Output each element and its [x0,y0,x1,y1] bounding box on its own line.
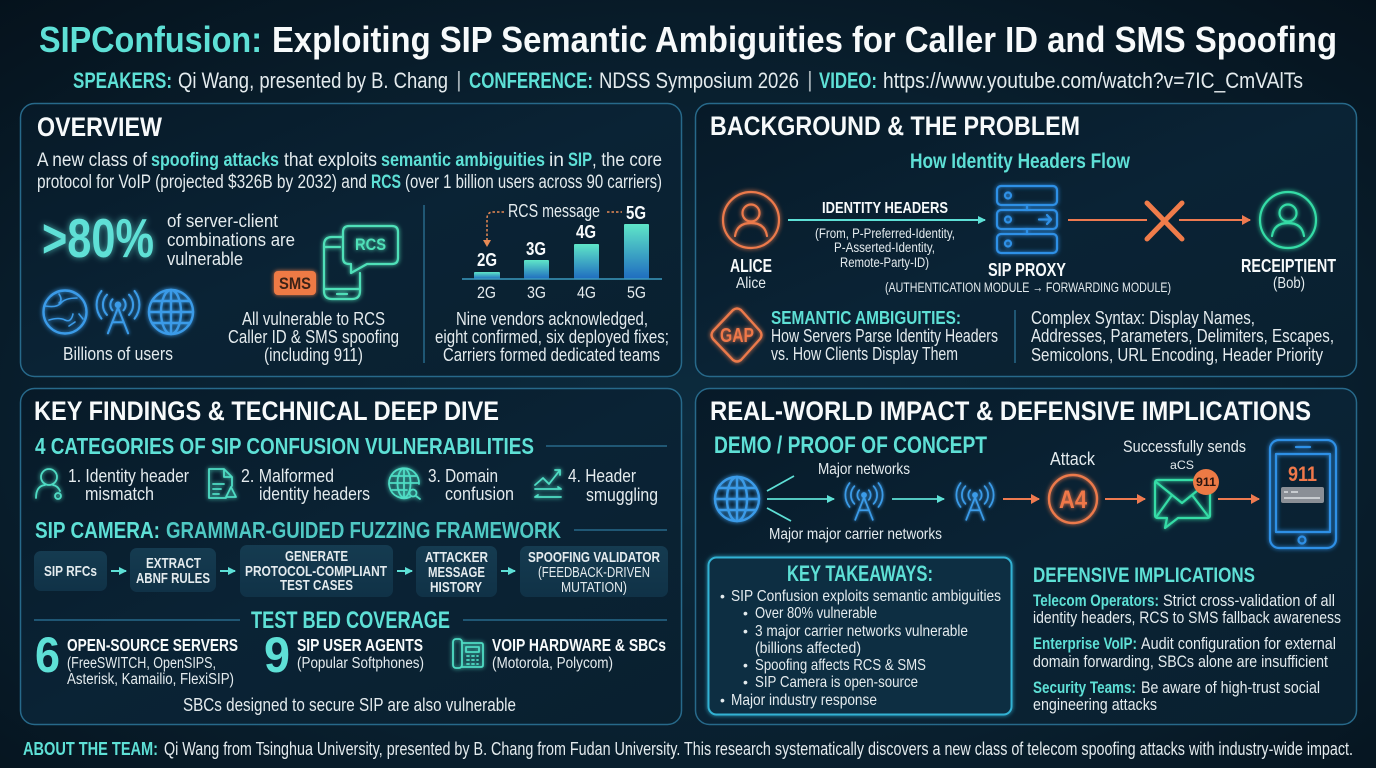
flow step: spoofing validator: MUTATION) [561,579,627,596]
label: successfully sends: Successfully sends [1123,437,1246,456]
icon: phone showing 911: 911 [1288,463,1317,486]
caption: all vulnerable: Caller ID & SMS spoofing [228,326,399,347]
heading: key findings: KEY FINDINGS & TECHNICAL DEEP DIVE [34,396,499,426]
section: defensive implications: Be aware of high-trust social [1141,679,1320,697]
section: defensive implications: Enterprise VoIP: [1033,635,1137,653]
subtitle: speakers, conference, video: CONFERENCE: [469,68,593,93]
flow step: attacker message history: HISTORY [430,579,482,596]
category 2: malformed identity headers: 2. Malformed [241,465,334,486]
label: major networks: Major networks [818,461,910,478]
bar chart: RCS message by generation: 4G [577,283,596,302]
stat: 6 open-source servers [35,627,238,688]
overview intro text: A new class of [37,150,148,171]
text: semantic ambiguities [771,307,998,364]
stat: 9 SIP user agents: 9 [264,627,290,683]
label: recipient: RECEIPTIENT [1241,256,1336,276]
heading: real-world impact: REAL-WORLD IMPACT & DEFENSIVE IMPLICATIONS [710,396,1311,426]
icon: A4 attack: A4 [1059,486,1087,514]
stat: 9 SIP user agents: (Popular Softphones) [297,655,424,672]
callout: key takeaways: Major industry response [731,692,877,709]
subtitle: speakers, conference, video: VIDEO: [819,68,877,93]
callout: key takeaways: 3 major carrier networks vulnerable [755,623,968,640]
bar chart: RCS message by generation: 2G [477,250,497,270]
stat: 9 SIP user agents [264,627,424,683]
overview intro text: semantic ambiguities [381,150,545,171]
label: SIP proxy: SIP PROXY [988,260,1066,280]
label: successfully sends [1123,437,1246,472]
panel: key findings [20,388,682,724]
overview intro text: that exploits [284,150,377,171]
flow step: generate test cases: PROTOCOL-COMPLIANT [245,563,387,580]
label: Alice [730,256,772,292]
bar chart: RCS message by generation: RCS message [508,201,600,221]
arrow [1003,498,1039,500]
subtitle: speakers, conference, video: SPEAKERS: [73,68,172,93]
flow step: extract ABNF rules: EXTRACT [146,555,201,572]
panel: overview [20,104,682,376]
overview intro text: in [549,150,564,171]
stat description: vulnerable [167,248,243,269]
caption: vendors: Carriers formed dedicated teams [443,344,660,365]
icon: Alice [723,192,779,248]
flow step: SIP RFCs: SIP RFCs [44,563,97,580]
label: Alice: ALICE [730,256,772,276]
stat description: combinations are [167,229,295,250]
bar chart: RCS message by generation [462,201,662,302]
overview intro text: RCS [371,172,401,193]
label: identity headers: P-Asserted-Identity, [834,240,935,255]
flow step: generate test cases: TEST CASES [280,577,353,594]
category 3: domain confusion: 3. Domain [428,465,498,486]
icon: SMS badge: SMS [279,274,311,293]
label: successfully sends: aCS [1170,458,1194,472]
callout: key takeaways: • [743,674,748,690]
flow step: spoofing validator [520,546,668,597]
label: recipient [1241,256,1336,292]
flow step: spoofing validator: SPOOFING VALIDATOR [528,549,660,566]
category 2: malformed identity headers [209,465,370,504]
section: defensive implications: Strict cross-validation of all [1163,592,1335,610]
label: carrier networks: Major major carrier networks [769,526,942,543]
section: defensive implications: Telecom Operators: [1033,592,1159,610]
VoIP hardware and SBCs: (Motorola, Polycom) [492,655,613,672]
flow step: SIP RFCs [34,551,107,591]
caption: all vulnerable: (including 911) [264,344,363,365]
bar chart: RCS message by generation: 5G [627,283,646,302]
heading: background: BACKGROUND & THE PROBLEM [710,111,1080,141]
icon: tower 1 [845,483,883,520]
caption: vendors [435,308,669,365]
callout: key takeaways: • [743,623,748,639]
category 3: domain confusion [389,465,514,504]
caption: billions of users: Billions of users [63,343,173,364]
icon: 911 badge [1193,469,1219,495]
arrow: blocked path [1068,203,1250,239]
callout: key takeaways: (billions affected) [755,640,861,657]
subtitle: speakers, conference, video: https://www.youtube.com/watch?v=7IC_CmVAlTs [883,68,1303,93]
caption: all vulnerable: All vulnerable to RCS [242,308,385,329]
stat description: of server-client [167,210,278,231]
title: SIPConfusion: [39,19,262,60]
subtitle: speakers, conference, video: NDSS Symposium 2026 [599,68,799,93]
text: semantic ambiguities: vs. How Clients Display Them [771,344,958,364]
icon: globe [149,290,193,334]
callout: key takeaways: • [720,692,725,708]
label: SIP proxy [885,260,1171,295]
category 3: domain confusion: confusion [445,483,514,504]
callout: key takeaways: • [743,657,748,673]
heading: overview: OVERVIEW [37,112,162,142]
stat: 6 open-source servers: 6 [35,627,60,683]
overview intro text: SIP [568,150,592,171]
flow step: spoofing validator: (FEEDBACK-DRIVEN [538,564,650,581]
callout: key takeaways [708,558,1012,714]
flow step: attacker message history: ATTACKER [425,549,488,566]
overview intro text: , the core [592,150,662,171]
stat description [167,210,295,269]
label: recipient: (Bob) [1273,275,1305,292]
bar chart: RCS message by generation: 3G [526,239,546,259]
stat: 6 open-source servers: Asterisk, Kamailio, FlexiSIP) [67,671,234,688]
text: semantic ambiguities: SEMANTIC AMBIGUITIES: [771,307,961,328]
subtitle: speakers, conference, video: | [456,67,462,92]
label: identity headers: IDENTITY HEADERS [822,200,948,217]
callout: key takeaways: KEY TAKEAWAYS: [787,561,933,586]
section: defensive implications: engineering attacks [1033,696,1157,714]
arrow [397,570,412,572]
panel: background and the problem [696,104,1356,376]
flow step: attacker message history: MESSAGE [428,564,485,581]
callout: key takeaways: SIP Camera is open-source [755,674,918,691]
subheading: SIP camera: SIP CAMERA: [35,517,160,543]
section: defensive implications: Security Teams: [1033,679,1136,697]
footer: about the team: ABOUT THE TEAM: [23,738,158,759]
subheading: demo: DEMO / PROOF OF CONCEPT [714,432,987,459]
subtitle: speakers, conference, video: | [807,67,813,92]
subheading: test bed coverage: TEST BED COVERAGE [251,607,450,634]
stat: 6 open-source servers: OPEN-SOURCE SERVERS [67,635,238,655]
arrow [892,498,944,500]
overview intro text: (over 1 billion users across 90 carriers) [405,172,662,193]
callout: key takeaways: • [720,588,725,604]
stat: 6 open-source servers: (FreeSWITCH, OpenSIPS, [67,655,216,672]
arrow: identity headers [788,219,985,221]
category 4: header smuggling: 4. Header [568,465,636,486]
icon: tower 2 [956,483,994,520]
label: attack: Attack [1050,449,1096,469]
icon: A4 attack [1049,475,1097,523]
icon: GAP diamond [712,308,762,362]
VoIP hardware and SBCs [453,635,666,672]
subheading: SIP camera: GRAMMAR-GUIDED FUZZING FRAMEWORK [166,517,561,543]
icon: phone showing 911 [1270,440,1336,548]
category 2: malformed identity headers: identity headers [259,483,370,504]
bar chart: RCS message by generation: 4G [576,222,596,242]
section: defensive implications: domain forwarding, SBCs alone are insufficient [1033,653,1328,671]
text: complex syntax [1031,307,1334,365]
overview intro text [37,150,662,193]
icon: phone with RCS bubble [324,226,398,299]
text: semantic ambiguities: How Servers Parse Identity Headers [771,326,998,346]
overview intro text: spoofing attacks [151,150,279,171]
note: SBCs: SBCs designed to secure SIP are also vulnerable [183,694,516,715]
label: identity headers [815,200,955,270]
flow step: generate test cases [240,545,393,597]
section: defensive implications: DEFENSIVE IMPLICATIONS [1033,564,1255,587]
subheading: flow: How Identity Headers Flow [910,150,1131,173]
icon: globe with map [44,290,86,334]
label: identity headers: Remote-Party-ID) [840,255,929,270]
VoIP hardware and SBCs: VOIP HARDWARE & SBCs [492,635,666,655]
category 1: identity header mismatch: mismatch [85,483,154,504]
arrow [220,570,235,572]
arrow [1218,498,1259,500]
arrow [1105,498,1145,500]
icon: phone with RCS bubble: RCS [355,235,386,254]
arrow [111,570,126,572]
subtitle: speakers, conference, video [73,67,1303,93]
label: identity headers: (From, P-Preferred-Identity, [815,226,955,241]
flow step: extract ABNF rules: ABNF RULES [136,570,210,587]
flow step: generate test cases: GENERATE [285,548,348,565]
icon: envelope message [1155,480,1210,528]
stat: 9 SIP user agents: SIP USER AGENTS [297,635,423,655]
subheading: SIP camera [35,517,561,543]
bar chart: RCS message by generation: 2G [477,283,496,302]
caption: all vulnerable [228,308,399,365]
category 4: header smuggling [535,465,658,505]
icon: globe [715,477,759,521]
label: Alice: Alice [736,275,766,292]
icon: SIP proxy server [997,186,1057,253]
stat: greater than 80 percent: >80% [42,207,154,269]
bar chart: RCS message by generation: 3G [527,283,546,302]
caption: vendors: Nine vendors acknowledged, [456,308,648,329]
category 1: identity header mismatch: 1. Identity header [68,465,189,486]
overview intro text: protocol for VoIP (projected $326B by 2032) and [37,172,367,193]
section: defensive implications [1033,564,1341,714]
panel: real-world impact [696,388,1356,724]
flow step: attacker message history [416,546,497,597]
callout: key takeaways: Spoofing affects RCS & SMS [755,657,926,674]
subheading: categories: 4 CATEGORIES OF SIP CONFUSION VULNERABILITIES [35,433,534,459]
arrow [501,570,515,572]
icon: GAP diamond: GAP [720,325,754,347]
section: defensive implications: Audit configuration for external [1141,635,1336,653]
caption: vendors: eight confirmed, six deployed fixes; [435,326,669,347]
flow step: extract ABNF rules [130,548,216,592]
label: SIP proxy: (AUTHENTICATION MODULE → FORWARDING MODULE) [885,279,1171,295]
category 4: header smuggling: smuggling [586,484,658,505]
text: complex syntax: Complex Syntax: Display Names, [1031,307,1255,328]
arrows from globe [767,476,834,521]
callout: key takeaways: Over 80% vulnerable [755,605,877,622]
icon: 911 badge: 911 [1196,475,1216,489]
icon: cell tower [97,291,139,333]
callout: key takeaways: • [743,605,748,621]
bar chart: RCS message by generation: 5G [626,203,646,223]
icon: recipient [1260,192,1316,248]
callout: key takeaways: SIP Confusion exploits semantic ambiguities [731,588,1001,605]
icon: SMS badge [274,271,316,295]
subtitle: speakers, conference, video: Qi Wang, presented by B. Chang [178,68,448,93]
category 1: identity header mismatch [36,465,189,504]
